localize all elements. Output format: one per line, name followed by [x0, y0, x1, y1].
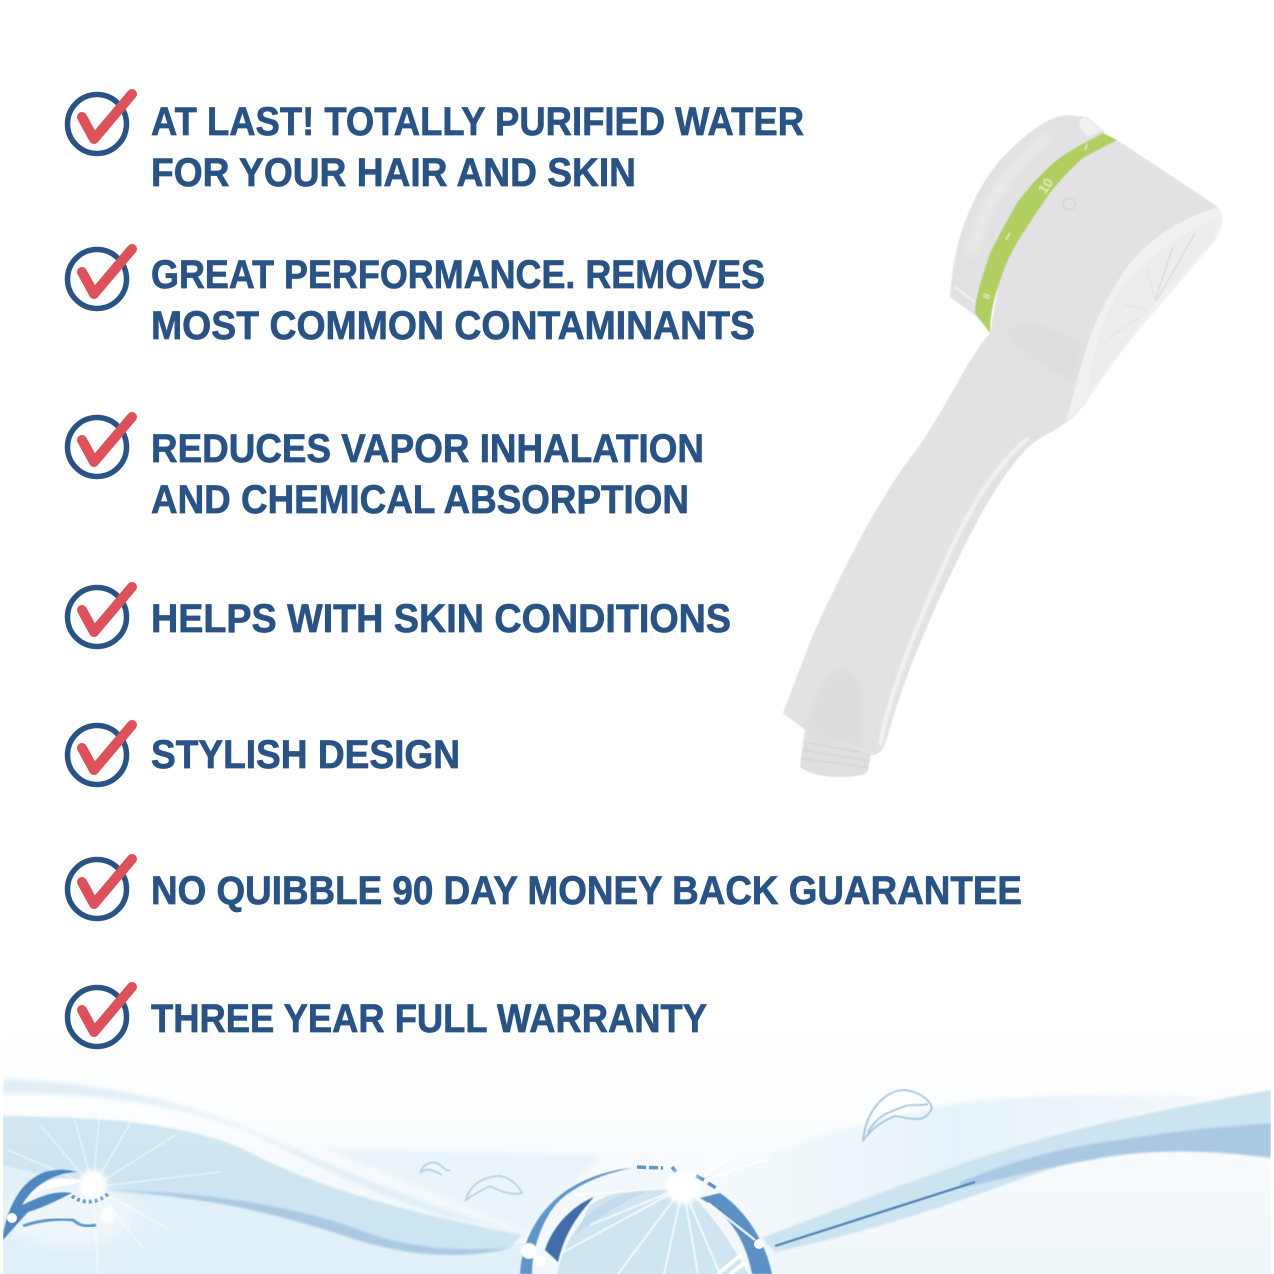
left bubble: [3, 1110, 220, 1274]
icon: check 1: [68, 94, 132, 154]
main wave body: [3, 1117, 522, 1255]
handle highlight: [880, 438, 1028, 745]
connector collar: [806, 670, 863, 747]
small droplets: [420, 1090, 932, 1200]
text: performance: GREAT PERFORMANCE. REMOVES: [151, 253, 765, 297]
nozzle face: [1088, 220, 1217, 393]
dial numbers: 10: [1034, 175, 1057, 197]
icon: check 5: [68, 725, 132, 784]
nozzle pattern: [1110, 233, 1195, 337]
icon: check 7: [68, 987, 132, 1046]
dark thin line: [775, 1182, 975, 1246]
thread connector: [800, 730, 873, 777]
text: purified water: [151, 100, 804, 195]
handle and head body: [783, 133, 1222, 755]
dark wave streak: [110, 1190, 512, 1255]
central bubble: [520, 1150, 772, 1274]
icon: check 4: [68, 587, 132, 646]
text: performance: MOST COMMON CONTAMINANTS: [151, 304, 755, 348]
dial cap: [950, 115, 1105, 332]
text: vapor: [151, 427, 704, 522]
green dial band: [975, 133, 1117, 333]
text: performance: [151, 253, 765, 348]
lower left pale water: [3, 1115, 526, 1274]
text: purified water: AT LAST! TOTALLY PURIFIED WATER: [151, 100, 804, 144]
icon: check 6: [68, 859, 132, 918]
text: vapor: REDUCES VAPOR INHALATION: [151, 427, 704, 471]
pale centre wave: [332, 1148, 596, 1227]
text: purified water: FOR YOUR HAIR AND SKIN: [151, 151, 636, 195]
icon: check 2: [68, 249, 132, 308]
body shadow patch: [1005, 326, 1082, 380]
right pale wave: [796, 1096, 1190, 1199]
right dark streak: [960, 1123, 1271, 1188]
water background scene: [3, 1077, 1271, 1274]
logo mark: [1063, 198, 1075, 210]
cap highlight: [970, 135, 1050, 255]
head rim: [1066, 207, 1222, 422]
text: vapor: AND CHEMICAL ABSORPTION: [151, 478, 689, 522]
text: stylish design: STYLISH DESIGN: [151, 733, 460, 777]
dial numbers: 8: [981, 292, 994, 301]
text: skin conditions: HELPS WITH SKIN CONDITIONS: [151, 597, 731, 641]
text: warranty: THREE YEAR FULL WARRANTY: [151, 997, 707, 1041]
icon: check 3: [68, 417, 132, 476]
right wave band: [762, 1090, 1271, 1252]
text: guarantee: NO QUIBBLE 90 DAY MONEY BACK GUARANTEE: [151, 869, 1022, 913]
upper wave band: [3, 1078, 486, 1225]
shower head product: [783, 115, 1222, 777]
cap ridge: [955, 287, 975, 302]
dial numbers: [981, 144, 1087, 301]
